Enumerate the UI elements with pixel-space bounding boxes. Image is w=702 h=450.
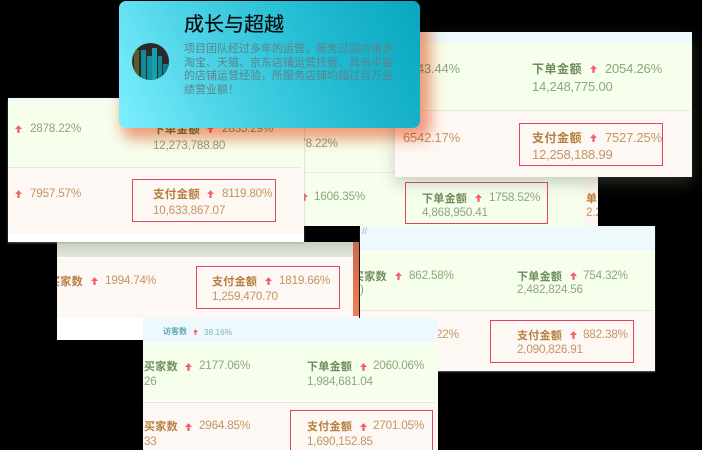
icon: up arrow [590,134,597,142]
metric label: order amount: 下单金额 [517,268,562,284]
icon: up arrow [15,125,22,133]
metric value: payment amount: 10,633,867.07 [153,204,225,217]
orange side stripe [353,242,359,316]
metric value: buyers percent: 2177.06% [199,359,250,372]
metric value: payment amount: 1,259,470.70 [212,290,278,303]
metric label: payment amount: 支付金额 [517,327,562,343]
panel: upper left data card [8,98,304,242]
metric label: payment amount: 支付金额 [307,418,352,434]
metric: order amount highlighted [405,182,548,224]
row: payments [360,311,655,371]
metric value: payment percent: 882.38% [583,328,628,341]
highlight box [519,123,663,166]
metric value: order amount: 14,248,775.00 [532,79,613,94]
icon: up arrow [265,277,272,285]
metric label: buyers clipped: 买家数 [144,418,178,434]
row: payments [395,111,692,177]
panel: bottom data card [143,318,438,450]
metric value: buyers count clipped: 26 [144,375,157,388]
metric value: order percent: 2060.06% [373,359,424,372]
metric value: buyers percent: 2878.22% [30,122,81,135]
row: payments [143,403,438,450]
highlight box [290,410,433,450]
icon: up arrow [185,423,192,431]
header strip [360,226,655,251]
description text: 项目团队经过多年的运营，服务过国内诸多 [184,40,393,56]
icon: up arrow [590,65,597,73]
metric value: buyers percent: 7957.57% [30,187,81,200]
description text: 淘宝、天猫、京东店铺运营托管。具有丰富 [184,54,393,70]
icon: up arrow [193,329,198,335]
row: orders [8,101,304,167]
icon: up arrow [207,128,214,133]
icon: up arrow [207,190,214,198]
icon: bar chart badge [132,43,169,80]
panel: top right data card [395,32,692,177]
metric value: order amount: 1,984,681.04 [307,375,373,388]
metric label: clipped: 单 [586,190,597,206]
icon: up arrow [570,272,577,280]
metric value: buyers percent: 1994.74% [105,274,156,287]
metric label: buyers clipped: 买家数 [144,358,178,374]
row: orders [143,343,438,401]
highlight box [132,179,276,222]
shaded header strip [57,242,359,257]
highlight box [490,320,634,363]
metric value: order amount: 4,868,950.41 [422,206,488,219]
metric value: payment percent: 2701.05% [373,419,424,432]
metric label: order amount: 下单金额 [422,190,467,206]
metric value: order amount: 2,482,824.56 [517,283,583,296]
panel: lower right data card [360,226,655,371]
metric value: payment amount: 2,090,826.91 [517,343,583,356]
panel: growth title card [119,1,420,128]
metric value: buyers count clipped: 33 [144,435,157,448]
header strip: visitors [143,318,438,342]
metric value: order percent: 2054.26% [605,61,662,76]
row: payments [8,168,304,234]
metric value: order percent: 1758.52% [489,191,540,204]
metric value: payment percent: 8119.80% [222,187,272,200]
icon: up arrow [395,272,402,280]
metric value: payment amount: 1,690,152.85 [307,435,373,448]
row: orders [360,252,655,310]
metric label: payment amount: 支付金额 [153,186,200,202]
highlight box [196,266,340,309]
metric: clipped cream column [583,108,598,226]
header strip [8,98,304,101]
metric value: order percent: 2835.29% [222,122,273,135]
metric value: payment percent: 1819.66% [279,274,330,287]
metric label: visitors: 访客数 [163,326,187,337]
panel: middle back data card [296,108,598,226]
metric label: order amount: 下单金额 [532,60,582,77]
icon: up arrow [304,193,308,201]
metric value: payment amount: 12,258,188.99 [532,147,613,162]
icon: up arrow [475,194,482,202]
metric value: payment percent: 7527.25% [605,130,662,145]
description text: 的店铺运营经验，所服务店铺均超过百万业 [184,67,393,83]
icon: up arrow [360,423,367,431]
metric value: order percent: 754.32% [583,269,628,282]
metric: buyer percentage: 1606.35% [314,190,365,203]
row: orders [395,43,692,110]
icon: up arrow [570,331,577,339]
metric value: buyers percent: 43.44% [417,61,460,76]
metric value: order amount: 12,273,788.80 [153,139,225,152]
icon: up arrow [15,190,22,198]
panel: lower left data card [57,242,359,340]
metric value: buyers percent: 2964.85% [199,419,250,432]
icon: up arrow [185,363,192,371]
row: payments [57,258,359,318]
heading: 成长与超越 [184,8,284,37]
icon: up arrow [360,363,367,371]
metric value: buyers percent: 862.58% [409,269,454,282]
header strip [395,32,692,43]
metric value: clipped count: ) [360,283,364,296]
metric value: clipped percent: 22% [436,328,459,341]
metric value: buyers percent: 6542.17% [403,130,460,145]
description text: 绩营业额！ [184,80,239,96]
metric label: order amount: 下单金额 [153,121,200,137]
card glow [119,1,420,128]
icon: up arrow [91,277,98,285]
metric value: visitors percent: 38.16% [204,327,232,337]
header fragment: clipped marks: // [362,226,367,236]
description text [184,40,393,96]
metric label: payment amount: 支付金额 [532,129,582,146]
metric label: order amount: 下单金额 [307,358,352,374]
metric label: payment amount: 支付金额 [212,273,257,289]
